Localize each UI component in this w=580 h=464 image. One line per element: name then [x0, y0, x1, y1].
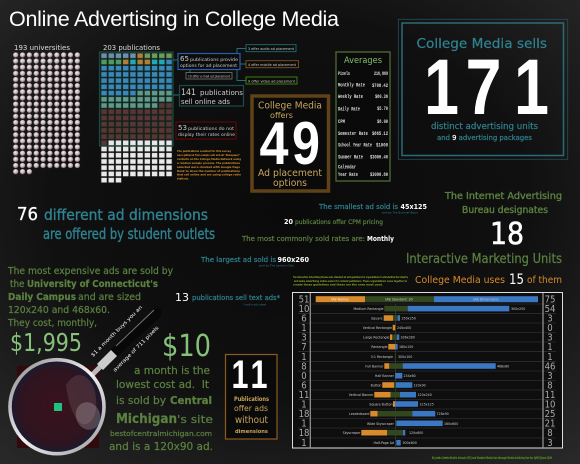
column: left counts	[299, 294, 309, 449]
row labels: dimensions: 160x600	[444, 422, 458, 426]
handle text: top: $1 a month buys you an	[90, 305, 144, 358]
fine print: methodology: that sell online and are using college radio	[177, 172, 241, 176]
stat: IAB designates 18: Bureau designates	[462, 205, 548, 216]
fine print: methodology	[177, 149, 241, 180]
stat: College Media uses 15: College Media uses	[415, 275, 506, 286]
row labels: ad names: Half Banner	[375, 374, 395, 378]
column: left counts: 18	[299, 409, 309, 420]
stat: College Media uses 15: of them	[527, 275, 562, 286]
row labels: ad names: Rectangle	[371, 345, 388, 349]
panel: College Media offers 49: 4	[260, 110, 289, 177]
callout: 65 publications	[178, 54, 240, 70]
panel: College Media sells 171: College Media sells	[416, 36, 547, 52]
callout: 9 video: 9 offer video ad placement	[248, 79, 296, 83]
handle	[113, 313, 157, 354]
callout: 53 publications: publications do not	[188, 126, 235, 131]
row labels: dimensions: 728x90	[436, 412, 449, 416]
text: lowest cost ad: Michigan	[116, 412, 177, 427]
panel: 11 publications without dimensions: dimensions	[235, 429, 268, 435]
panel: Averages: $80.36	[375, 94, 388, 100]
fine print: methodology: selected were checked with Google Page	[177, 165, 240, 169]
fine print: methodology: Rank to show the number of publications	[177, 169, 240, 173]
callout: 141 publications: publications	[200, 89, 243, 97]
panel: 11 publications without dimensions	[226, 353, 277, 439]
stat: largest ad: 960x260	[278, 256, 310, 264]
fine print: IAB: create these guidelines and these are the ones most used.	[293, 282, 383, 286]
callout: 3 audio	[246, 45, 296, 52]
stat: smallest ad: The smallest ad sold is	[318, 203, 398, 211]
column: right counts: 10	[545, 400, 555, 410]
callout: 65 publications: 65	[180, 55, 189, 63]
column: right counts: 11	[545, 390, 555, 401]
row labels: ad names: Square Button	[369, 402, 392, 406]
column: right counts: 25	[545, 409, 555, 420]
row labels: ad names: Vertical Banner	[349, 393, 374, 397]
text: lowest cost ad: Central	[170, 395, 212, 407]
ad pixel square	[17, 366, 99, 448]
panel: publications	[100, 44, 173, 183]
row labels: dimensions: 300x100	[398, 355, 412, 359]
connectors between callouts	[173, 48, 246, 95]
heading: 203 publications: 203 publications	[103, 44, 160, 52]
callout: 53 publications: display their rates online	[178, 132, 236, 137]
row labels: dimensions: 120x600	[409, 431, 423, 435]
column: left counts: 6	[301, 380, 307, 392]
stat: $10: $10	[162, 329, 211, 364]
text: lowest cost ad: 's site	[177, 413, 213, 426]
text: lowest cost ad: and is a 120x90 ad.	[109, 441, 213, 453]
stat: College Media uses 15	[415, 272, 562, 288]
stat: 76 ad dimensions: are offered by student outlets	[43, 225, 215, 243]
reflections	[66, 375, 96, 424]
stat: smallest ad: 45x125	[400, 203, 427, 211]
column: left counts: 1	[301, 352, 307, 363]
callout: 10 e-mail	[186, 72, 232, 79]
text: most expensive ads: the	[10, 279, 24, 290]
column: left counts: 1	[301, 323, 307, 334]
panel: Averages: Monthly Rate	[338, 82, 365, 88]
row labels: dimensions: 336x280	[400, 336, 415, 340]
row labels: dimensions: 240x400	[397, 326, 411, 330]
column: left counts: 10	[299, 304, 309, 315]
panel: 11 publications without dimensions: without	[235, 415, 269, 426]
panel: College Media sells 171: 1	[424, 42, 459, 131]
panel: Averages: Daily Rate	[338, 106, 360, 112]
stat: smallest ad	[318, 203, 427, 214]
row labels: dimensions: 234x60	[404, 374, 416, 378]
column: left counts: 1	[301, 400, 307, 410]
stat: IAB designates 18: 18	[490, 217, 524, 252]
stat: common rates: Monthly	[367, 235, 394, 243]
panel: Averages: 216,869	[374, 71, 388, 77]
panel: Averages: School Year Rate	[338, 142, 372, 148]
callout: 141 publications: sell online ads	[181, 98, 230, 106]
heading: 193 universities: 193 universities	[14, 44, 70, 52]
row labels: ad names: Skyscraper	[343, 431, 361, 435]
column: right counts: 8	[547, 428, 553, 439]
column: left counts: 51	[299, 294, 309, 306]
panel: College Media sells 171	[398, 19, 568, 159]
text: lowest cost ad: is sold by	[116, 395, 166, 407]
stat: CPM pricing: publications offer CPM pricing	[295, 219, 383, 226]
panel: Averages: Weekly Rate	[338, 94, 363, 100]
callout: 3 audio: 3 offer audio ad placement	[248, 47, 295, 51]
panel: 11 publications without dimensions: Publications	[234, 396, 269, 403]
stat: $1,995: $1,995	[10, 328, 82, 357]
panel: Averages: $865.12	[372, 131, 388, 137]
bars	[316, 296, 538, 446]
header labels	[331, 298, 499, 302]
panel: College Media offers 49: College Media	[258, 100, 322, 112]
callout: 10 e-mail: 10 offer e-mail ad placement	[188, 74, 231, 78]
callout: 65 publications: publications provide	[190, 57, 239, 62]
row labels: dimensions: 300x250	[511, 307, 525, 311]
text: most expensive ads: The most expensive ads are sold by	[7, 266, 173, 277]
panel: Averages: Semester Rate	[338, 131, 368, 137]
stat: College Media uses 15: 15	[509, 272, 524, 288]
panel: 11 publications without dimensions: 1	[250, 353, 268, 397]
stat: IAB designates 18: Interactive Marketing Units	[406, 252, 562, 267]
row labels: dimensions: 180x150	[399, 345, 413, 349]
chart: IAB ad units	[292, 292, 562, 449]
green pixel	[54, 403, 62, 411]
panel: Averages: $8.00	[377, 119, 388, 125]
column: left counts: 11	[299, 390, 309, 401]
panel: Averages: $3096.80	[370, 172, 388, 178]
panel: College Media offers 49: Ad placement	[258, 168, 322, 179]
panel: Averages: Year Rate	[338, 172, 358, 178]
panel: College Media offers 49	[252, 96, 328, 191]
row labels: dimensions: 468x60	[497, 364, 509, 368]
callout: 4 mobile: 4 offer mobile ad placement	[248, 63, 297, 67]
header labels: IAB Dimensions	[473, 298, 499, 302]
row labels: ad names: 3:1 Rectangle	[371, 355, 393, 359]
column: left counts: 3	[301, 332, 307, 344]
stat: largest ad: The largest ad sold is	[200, 256, 276, 264]
row labels: dimensions: 300x600	[402, 441, 417, 445]
row labels: ad names: Full Banner	[365, 364, 384, 368]
row labels: ad names: Leaderboard	[349, 412, 370, 416]
row labels: ad names	[343, 307, 395, 445]
text: most expensive ads: and are sized	[78, 292, 141, 303]
column: right counts	[545, 294, 555, 449]
handle text: bottom: average of 711 pixels	[112, 325, 161, 373]
panel: Averages: Averages	[344, 56, 382, 66]
stat: 76 ad dimensions	[17, 204, 215, 243]
grid lines	[298, 304, 556, 438]
text: most expensive ads: They cost, monthly,	[7, 318, 97, 329]
fine print: IAB	[293, 275, 408, 286]
column: left counts: 1	[301, 418, 307, 430]
lens	[10, 360, 104, 454]
fine print: methodology: The publications counted for this survey	[177, 149, 231, 153]
row labels: ad names: Wide Skyscraper	[367, 422, 395, 426]
stat: 13 text ads: 13	[175, 291, 189, 304]
callout: 9 video	[246, 77, 297, 84]
text: lowest cost ad: a month is the	[134, 365, 210, 377]
column: right counts: 75	[545, 294, 555, 306]
panel: College Media offers 49: options	[273, 178, 307, 189]
callout: 65 publications: options for ad placement	[180, 63, 238, 68]
text: lowest cost ad: bestofcentralmichigan.com	[110, 430, 212, 438]
panel: College Media offers 49: offers	[270, 111, 293, 120]
column: right counts: 8	[547, 380, 553, 392]
column: right counts: 3	[547, 438, 553, 449]
column: left counts: 18	[299, 428, 309, 439]
icon: magnifying glass	[10, 310, 157, 454]
panel: Averages: $5.70	[377, 106, 388, 112]
stat: 76 ad dimensions: 76	[17, 204, 38, 225]
column: right counts: 3	[547, 371, 553, 382]
fine print: methodology: stations.	[177, 176, 189, 180]
column: right counts: 1	[547, 352, 553, 363]
stat: IAB designates 18: The Internet Advertising	[444, 191, 562, 202]
panel: 11 publications without dimensions: 1	[232, 353, 248, 397]
fine print: IAB: The Interactive Advertising Bureau sets standard ad unit guidelines for organizations to standardize the industry	[293, 275, 408, 279]
axis bars	[310, 293, 543, 448]
fine print: methodology: a random sample process. The publications	[177, 161, 240, 165]
text: most expensive ads: 120x240 and 468x60.	[8, 305, 110, 316]
column: left counts: 8	[301, 362, 307, 372]
text: most expensive ads: Daily Campus	[8, 292, 76, 303]
stat: 76 ad dimensions: different ad dimensions	[44, 206, 208, 224]
row labels: dimensions	[397, 307, 525, 445]
row labels: ad names: Button	[371, 384, 382, 388]
column: right counts: 54	[545, 304, 555, 315]
fine print: IAB: and make advertising online easier for content publishers. These organizations come together to	[294, 279, 407, 283]
stat: largest ad	[200, 256, 310, 268]
panel: College Media offers 49: 9	[292, 110, 320, 177]
panel: Averages	[336, 52, 390, 181]
column: right counts: 0	[547, 323, 553, 334]
panel: universities	[12, 44, 81, 175]
text: lowest cost ad: lowest cost ad. It	[116, 379, 209, 391]
row labels: ad names: Half-Page Ad	[374, 441, 394, 445]
panel: Averages: Summer Rate	[338, 154, 363, 160]
text: most expensive ads: University of Connecticut's	[27, 279, 158, 290]
panel: College Media sells 171: 7	[466, 42, 502, 131]
panel: 11 publications without dimensions: offer ads	[234, 404, 268, 413]
callout: 141 publications	[180, 86, 244, 106]
column: left counts: 0	[301, 371, 307, 382]
panel: College Media sells 171: 1	[514, 42, 549, 131]
panel: Averages: $1000	[376, 142, 388, 148]
header labels: IAB Standard: 30	[385, 298, 413, 302]
square grid: publications	[100, 53, 173, 183]
panel: Averages: CPM	[338, 119, 345, 125]
text: lowest cost ad	[109, 365, 213, 453]
row labels: dimensions: 250x250	[402, 316, 416, 320]
row labels: ad names: Vertical Rectangle	[363, 326, 392, 330]
column: right counts: 21	[545, 418, 555, 430]
panel: Averages: Calendar	[338, 164, 356, 170]
callout: 53 publications	[176, 122, 236, 139]
panel: Averages: $708.42	[372, 83, 388, 89]
column: right counts: 1	[547, 342, 553, 353]
row labels: dimensions: 120x240	[418, 393, 432, 397]
fine print: methodology: contacts on the College Media Network using	[177, 157, 241, 161]
text: most expensive ads	[7, 266, 173, 329]
panel: Averages: $3006.40	[370, 154, 388, 160]
frame around online publications	[100, 52, 173, 146]
stat: CPM pricing: 20	[284, 218, 294, 226]
dot grid: universities	[12, 52, 81, 175]
row labels: ad names: Square	[371, 316, 382, 320]
header labels: IAB Names	[331, 298, 349, 302]
column: left counts: 6	[301, 314, 307, 324]
column: right counts: 3	[547, 332, 553, 344]
column: right counts: 46	[545, 362, 555, 372]
centre line	[394, 304, 396, 448]
fine print: methodology: were gathered from sample sets and all "Newspaper"	[177, 153, 240, 157]
stat: largest ad: sold by The Lantern Ohio	[259, 264, 295, 268]
stat: common rates: The most commonly sold rates are:	[241, 235, 365, 243]
callout: 53 publications: 53	[178, 124, 187, 132]
column: left counts: 1	[301, 438, 307, 449]
row labels: ad names: Medium Rectangle	[353, 307, 384, 311]
stat: 13 text ads	[175, 291, 280, 306]
panel: Averages: Pixels	[338, 71, 350, 77]
stat: 13 text ads: *not included	[243, 302, 267, 306]
row labels: dimensions: 120x90	[414, 384, 426, 388]
column: left counts: 7	[301, 342, 307, 353]
panel: College Media sells 171: and 9 advertising packages	[437, 134, 532, 142]
stat: smallest ad: sold by The Bucknell Bison	[382, 210, 418, 214]
stat: IAB designates 18	[406, 191, 562, 267]
column: right counts: 3	[547, 314, 553, 324]
title: Online Advertising in College Media	[9, 7, 339, 31]
callout: 4 mobile	[246, 61, 298, 68]
row labels: ad names: Large Rectangle	[363, 336, 390, 340]
row labels: dimensions: 125x125	[420, 402, 434, 406]
panel: College Media sells 171: distinct advertising units	[431, 122, 538, 132]
callout: 141 publications: 141	[181, 88, 196, 98]
stat: 13 text ads: publications sell text ads*	[192, 294, 280, 302]
